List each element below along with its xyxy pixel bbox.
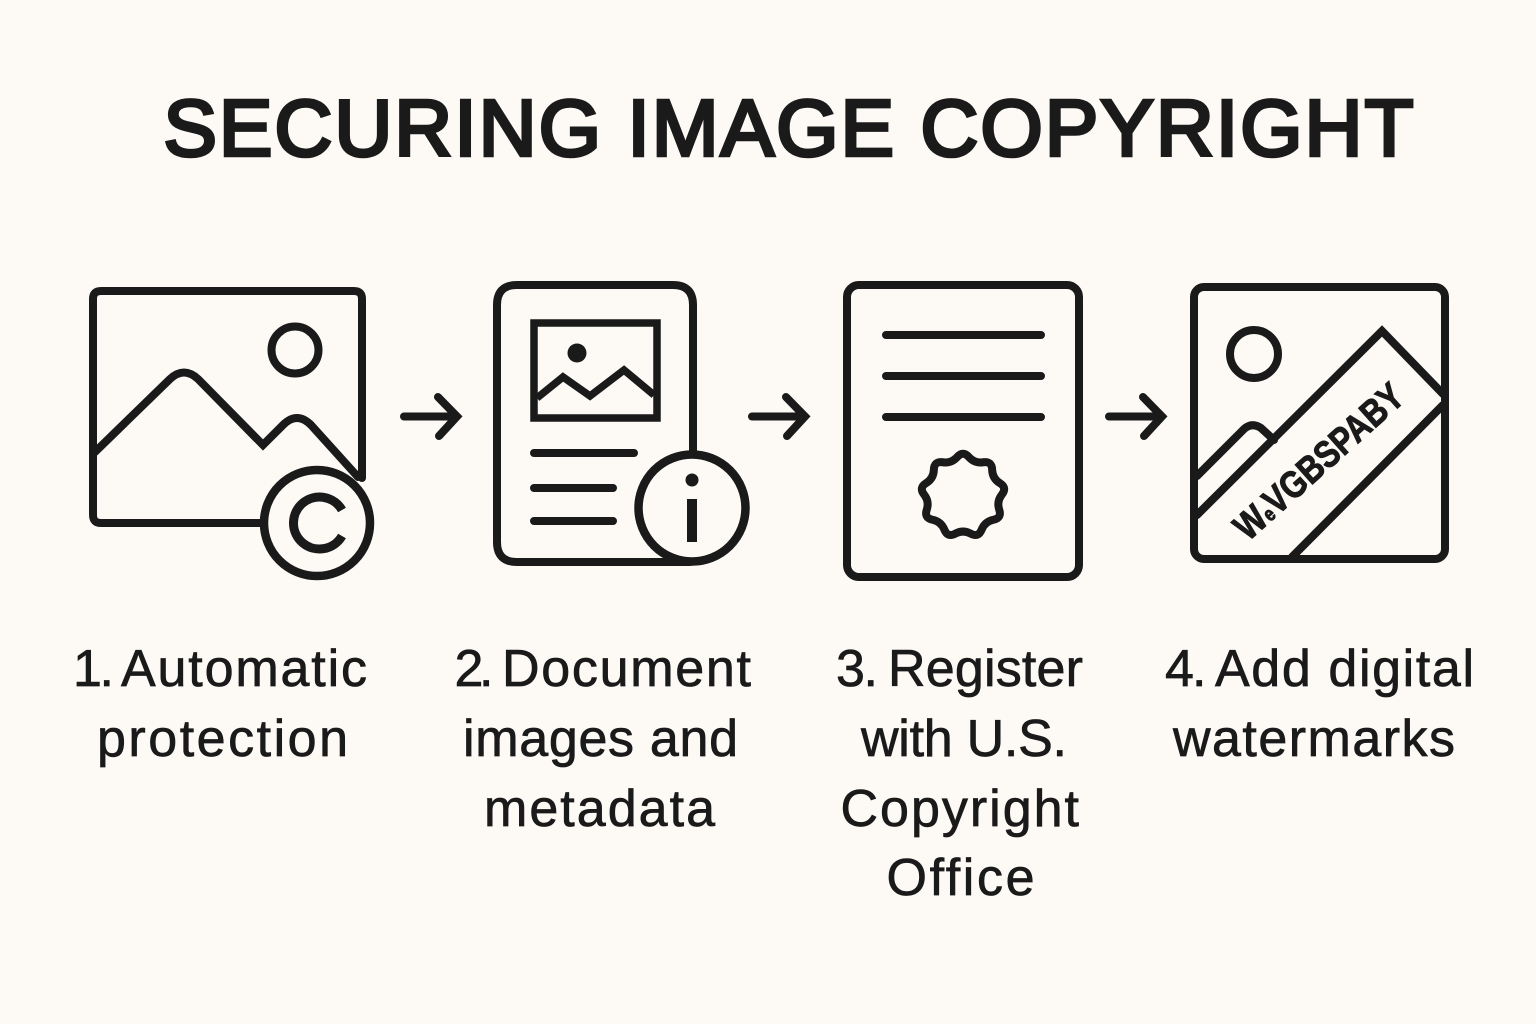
label 3: Copyright [840, 780, 1080, 838]
label 2: images and [463, 710, 738, 768]
label 4: Add digital [1215, 640, 1474, 698]
label 1: protection [97, 710, 348, 768]
label 2: metadata [484, 780, 715, 838]
label 4: 4. [1165, 640, 1206, 698]
label 3: with U.S. [860, 710, 1067, 768]
icon: certificate document with seal [847, 285, 1079, 577]
icon: image with copyright symbol [93, 291, 370, 576]
label 4: watermarks [1172, 710, 1455, 768]
title: SECURING IMAGE COPYRIGHT [164, 84, 1414, 172]
arrow 1 [404, 397, 457, 436]
icon: document with image and info [497, 285, 746, 562]
label 3: Office [886, 849, 1034, 907]
label 3: 3. [836, 640, 878, 698]
watermark text: WeVGBSPABY [1226, 375, 1413, 549]
label 2: Document [502, 640, 752, 698]
icon: image with watermark banner [1194, 287, 1445, 559]
label 3: Register [888, 640, 1083, 698]
label 4 [1165, 640, 1474, 768]
label 3 [836, 640, 1083, 907]
label 1 [73, 640, 367, 768]
label 1: Automatic [121, 640, 367, 698]
arrow 2 [752, 397, 805, 436]
label 2: 2. [454, 640, 494, 698]
label 2 [454, 640, 752, 838]
arrow 3 [1109, 397, 1162, 436]
label 1: 1. [73, 640, 114, 698]
